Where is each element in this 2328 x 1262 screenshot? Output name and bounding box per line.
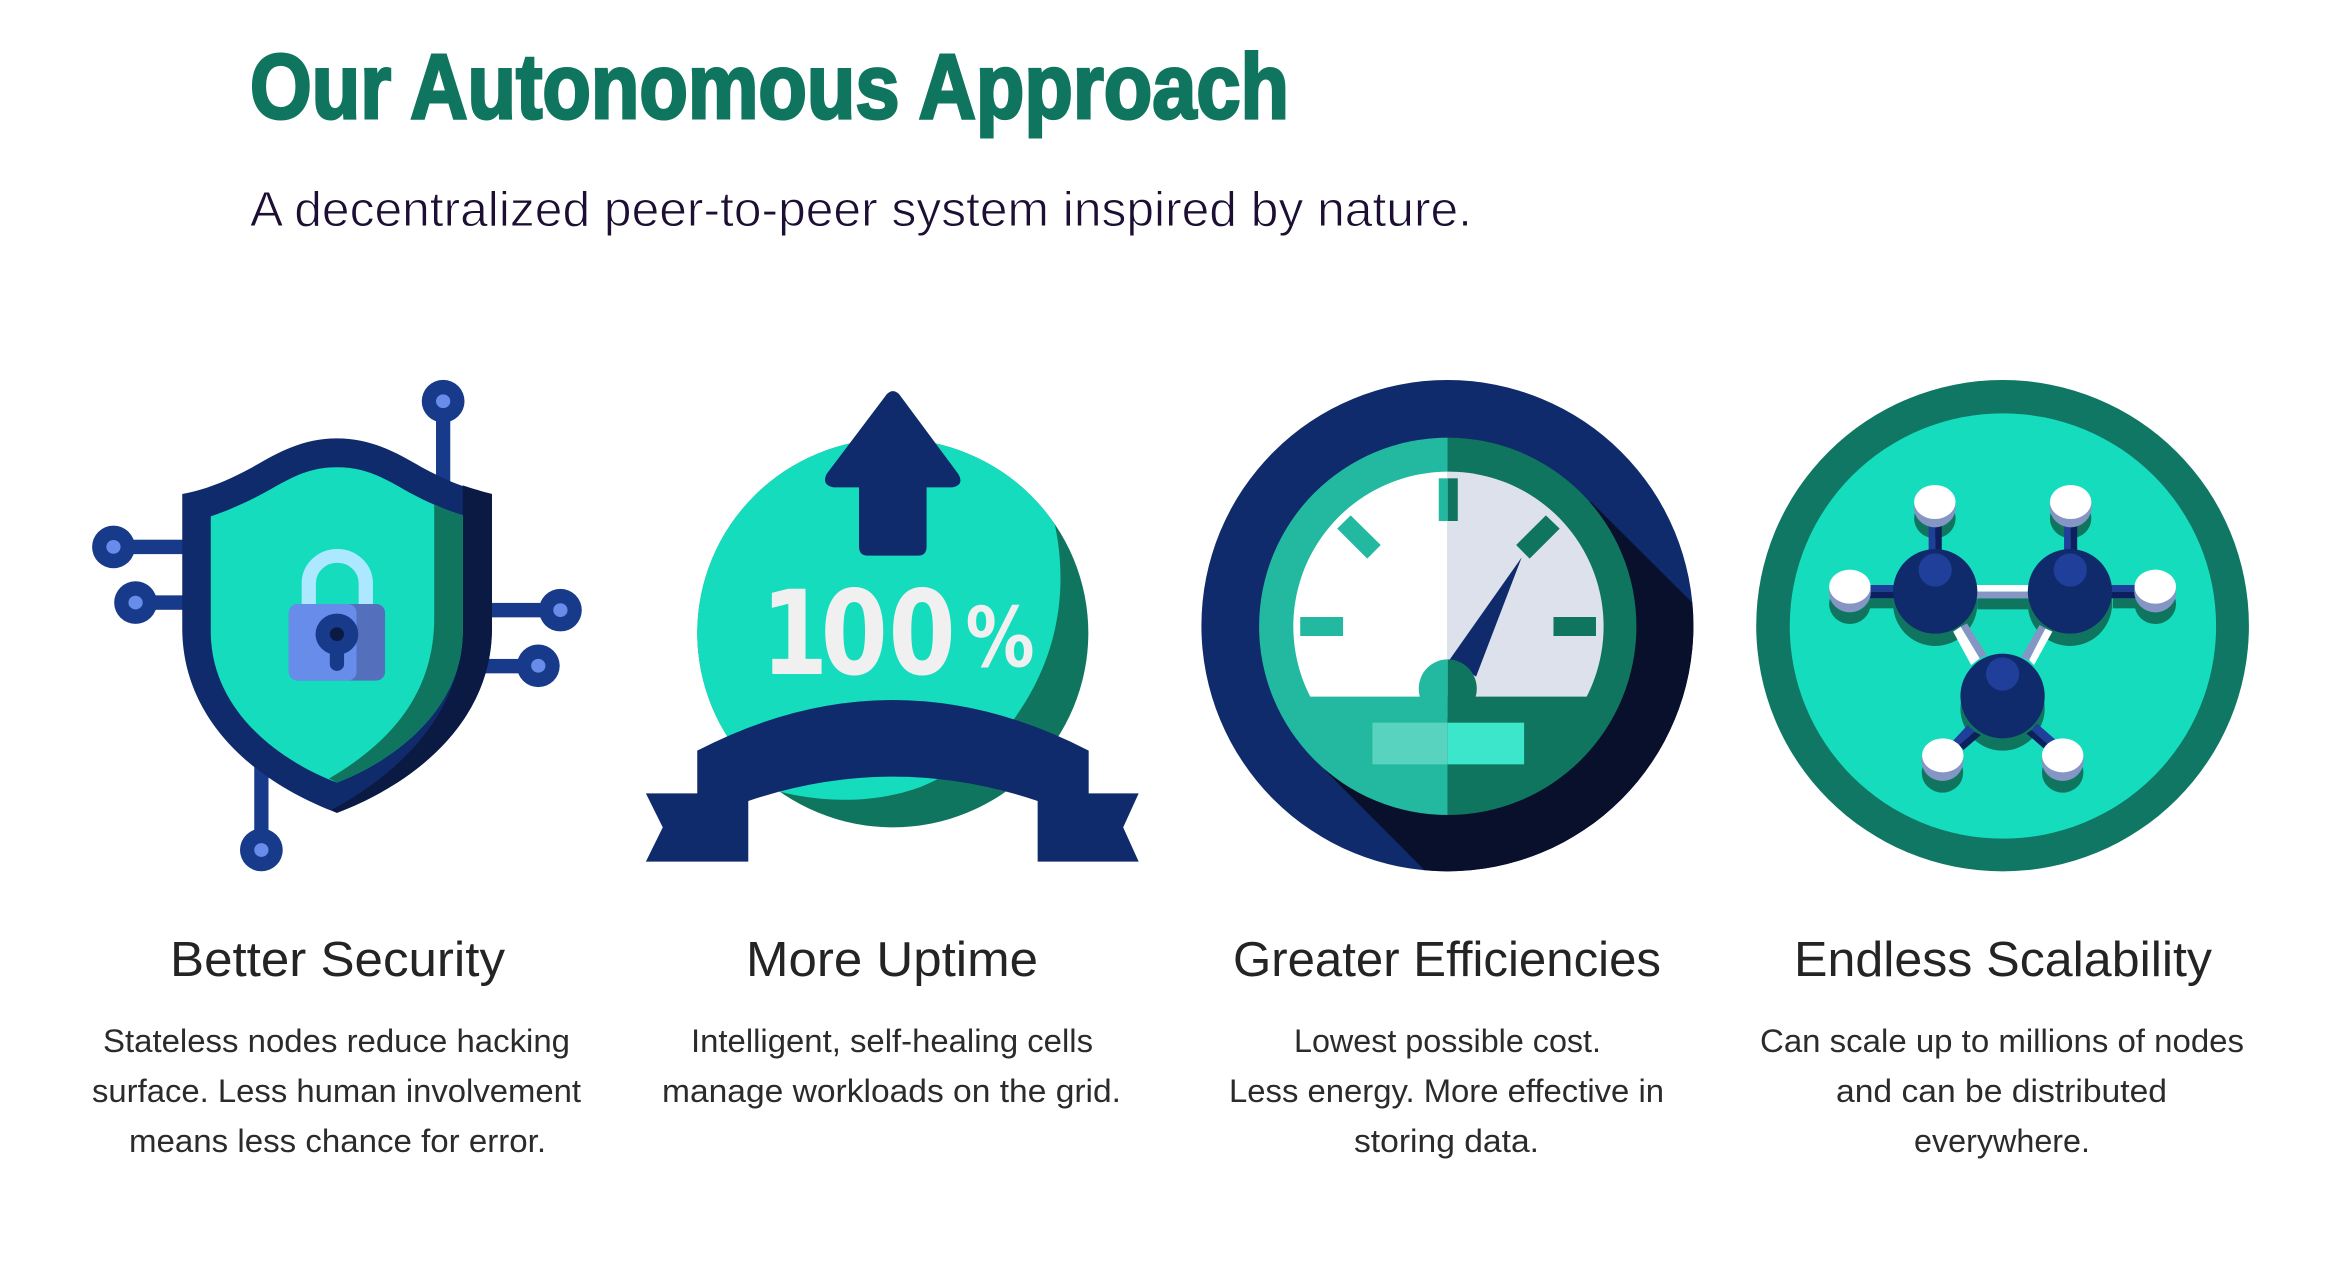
panel: greater efficiencies bbox=[1201, 380, 1694, 1159]
description: endless scalability bbox=[1760, 1023, 2244, 1159]
icon: shield with padlock and circuit nodes bbox=[92, 380, 582, 872]
description: endless scalability: everywhere. bbox=[1914, 1123, 2090, 1159]
description: greater efficiencies: storing data. bbox=[1354, 1123, 1539, 1159]
description: more uptime: manage workloads on the grid. bbox=[662, 1073, 1121, 1109]
heading: more uptime: More Uptime bbox=[746, 933, 1038, 987]
description: endless scalability: Can scale up to millions of nodes bbox=[1760, 1023, 2244, 1059]
icon: 100 percent badge with arrow and ribbon: % bbox=[965, 590, 1035, 687]
icon: 100 percent badge with arrow and ribbon: 100 bbox=[761, 567, 956, 702]
description: more uptime bbox=[662, 1023, 1121, 1109]
description: better security: Stateless nodes reduce hacking bbox=[103, 1023, 570, 1059]
description: more uptime: Intelligent, self-healing cells bbox=[691, 1023, 1093, 1059]
panel: endless scalability bbox=[1756, 380, 2249, 1159]
description: greater efficiencies: Less energy. More effective in bbox=[1229, 1073, 1664, 1109]
icon: speedometer gauge bbox=[1201, 380, 1694, 872]
subtitle: A decentralized peer-to-peer system inspired by nature. bbox=[250, 183, 1472, 237]
icon: molecule in circle bbox=[1756, 380, 2249, 872]
heading: greater efficiencies: Greater Efficiencies bbox=[1233, 933, 1661, 987]
description: greater efficiencies bbox=[1229, 1023, 1664, 1159]
panel: more uptime bbox=[630, 370, 1139, 1109]
title: Our Autonomous Approach bbox=[250, 36, 1289, 138]
description: better security bbox=[92, 1023, 581, 1159]
description: better security: surface. Less human involvement bbox=[92, 1073, 581, 1109]
description: endless scalability: and can be distributed bbox=[1836, 1073, 2167, 1109]
description: greater efficiencies: Lowest possible cost. bbox=[1294, 1023, 1601, 1059]
heading: endless scalability: Endless Scalability bbox=[1794, 933, 2212, 987]
heading: better security: Better Security bbox=[170, 933, 506, 987]
panel: better security bbox=[92, 380, 582, 1159]
description: better security: means less chance for error. bbox=[129, 1123, 546, 1159]
icon: 100 percent badge with arrow and ribbon bbox=[646, 391, 1139, 862]
